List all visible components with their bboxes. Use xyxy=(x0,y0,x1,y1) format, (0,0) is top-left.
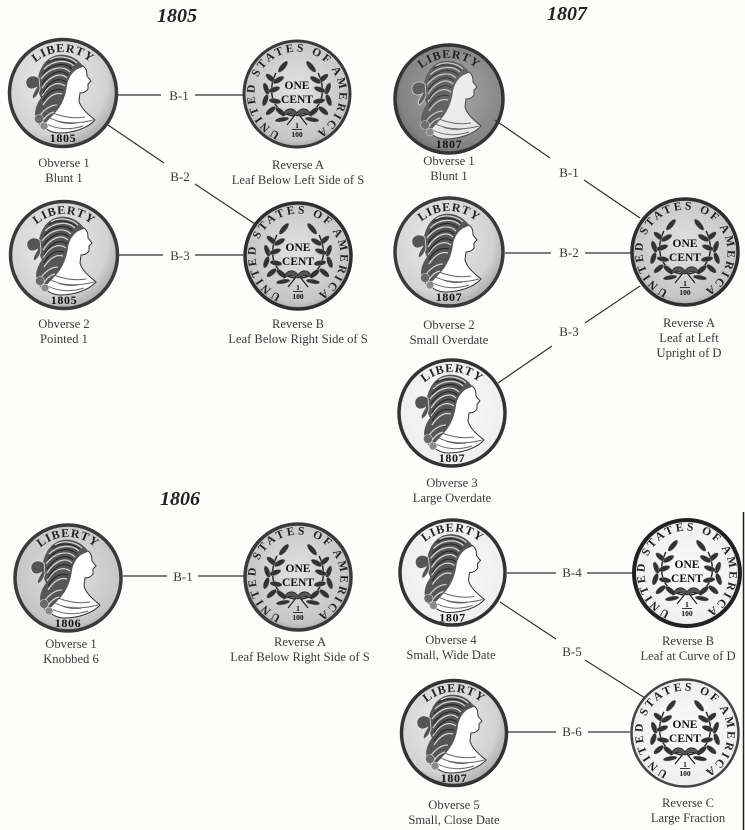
coin: 1807 obverse 5: 1807 xyxy=(441,771,467,785)
coin: 1807 reverse A: ONE xyxy=(673,238,698,250)
connector B-3: B-3 xyxy=(559,324,579,339)
coin: 1807 obverse 3 xyxy=(397,358,507,468)
connector B-2: B-2 xyxy=(559,245,579,260)
coin: 1807 reverse A: CENT xyxy=(669,252,701,264)
caption: reverse A: Leaf at Left xyxy=(659,331,719,345)
caption: reverse B: Leaf Below Right Side of S xyxy=(228,332,368,346)
connector B-1: B-1 xyxy=(173,569,193,584)
caption: reverse A: Upright of D xyxy=(656,346,722,360)
coin: 1806 reverse A: 1 xyxy=(296,604,300,613)
connector B-3 xyxy=(498,286,640,383)
connector B-1 xyxy=(118,88,243,103)
caption: obverse 5 small close date: Small, Close Date xyxy=(408,813,500,827)
caption: reverse A: Reverse A xyxy=(663,316,715,330)
coin: 1807 reverse B: ONE xyxy=(675,559,700,571)
coin: 1805 reverse B: 1 xyxy=(296,283,300,292)
coin: 1805 obverse 2 xyxy=(8,200,120,310)
caption: reverse A: Leaf Below Left Side of S xyxy=(232,173,364,187)
coin: 1807 obverse 5: LIBERTY xyxy=(422,684,486,702)
coin: 1807 obverse 1 xyxy=(393,43,505,155)
year title 1806: 1806 xyxy=(160,488,200,510)
caption: reverse C: Large Fraction xyxy=(651,811,726,825)
coin: 1805 obverse 2: LIBERTY xyxy=(32,206,96,224)
caption: reverse A: Leaf Below Right Side of S xyxy=(230,650,370,664)
coin: 1807 obverse 3: LIBERTY xyxy=(420,364,484,382)
connector B-2 xyxy=(108,125,255,224)
caption: obverse 1 blunt 1: Blunt 1 xyxy=(430,169,468,183)
section: 1807 lower xyxy=(398,518,742,827)
coin: 1805 obverse 1: 1805 xyxy=(50,131,76,145)
caption: reverse A: Reverse A xyxy=(274,635,326,649)
coin: 1807 obverse 3: 1807 xyxy=(439,451,465,465)
caption: obverse 4 small wide date: Small, Wide Date xyxy=(406,648,496,662)
caption: obverse 4 small wide date: Obverse 4 xyxy=(425,633,477,647)
connector B-4 xyxy=(507,565,632,580)
coin: 1805 reverse A: CENT xyxy=(281,94,313,106)
coin: 1807 reverse C: 1 xyxy=(683,760,687,769)
coin: 1807 obverse 4 xyxy=(398,518,507,627)
coin: 1806 reverse A: CENT xyxy=(282,577,314,589)
coin: 1805 reverse A: UNITED STATES OF AMERICA xyxy=(246,44,348,140)
caption: obverse 3 large overdate: Large Overdate xyxy=(413,491,492,505)
coin: 1807 reverse C: UNITED STATES OF AMERICA xyxy=(634,683,736,779)
coin: 1806 obverse 1: LIBERTY xyxy=(36,529,100,548)
coin: 1806 obverse 1 xyxy=(13,523,123,633)
caption: obverse 1 knobbed 6: Knobbed 6 xyxy=(43,652,99,666)
caption: obverse 1 blunt 1: Blunt 1 xyxy=(45,171,83,185)
year title 1807: 1807 xyxy=(547,3,588,25)
coin: 1807 reverse C: CENT xyxy=(669,733,701,745)
caption: obverse 2 pointed 1: Obverse 2 xyxy=(38,317,90,331)
caption: obverse 3 large overdate: Obverse 3 xyxy=(426,476,478,490)
connector B-5 xyxy=(500,602,645,698)
caption: obverse 5 small close date: Obverse 5 xyxy=(428,798,480,812)
caption: reverse B: Reverse B xyxy=(272,317,324,331)
connector B-3: B-3 xyxy=(170,248,190,263)
caption: reverse C: Reverse C xyxy=(662,796,714,810)
coin: 1807 obverse 2 xyxy=(393,196,505,308)
connector B-6 xyxy=(508,724,630,739)
caption: obverse 1 blunt 1: Obverse 1 xyxy=(423,154,475,168)
connector B-3 xyxy=(119,248,243,263)
year title 1805: 1805 xyxy=(157,5,197,27)
connector B-2: B-2 xyxy=(170,169,190,184)
connector B-1: B-1 xyxy=(169,88,189,103)
coin: 1805 reverse B: ONE xyxy=(286,242,311,254)
connector B-1 xyxy=(495,120,640,218)
coin: 1805 obverse 1 xyxy=(8,38,118,148)
coin: 1807 reverse A: 100 xyxy=(679,288,691,297)
coin: 1807 obverse 1: 1807 xyxy=(436,137,462,151)
section: 1805 xyxy=(8,5,368,346)
coin: 1807 obverse 4: 1807 xyxy=(439,610,466,624)
coin: 1807 reverse B: UNITED STATES OF AMERICA xyxy=(636,523,738,619)
connector B-1 xyxy=(123,569,245,584)
caption: obverse 1 blunt 1: Obverse 1 xyxy=(38,156,90,170)
connector B-4: B-4 xyxy=(562,565,582,580)
coin: 1807 reverse C: ONE xyxy=(673,719,698,731)
coin: 1807 obverse 5 xyxy=(400,678,508,788)
caption: reverse A: Reverse A xyxy=(272,158,324,172)
caption: reverse B: Reverse B xyxy=(662,634,714,648)
caption: obverse 2 small overdate: Obverse 2 xyxy=(423,318,475,332)
coin: 1807 reverse C: 100 xyxy=(679,769,691,778)
connector B-1: B-1 xyxy=(559,165,579,180)
coin: 1806 reverse A: 100 xyxy=(292,613,304,622)
coin: 1807 reverse A: UNITED STATES OF AMERICA xyxy=(634,202,736,298)
coin: 1805 obverse 1: LIBERTY xyxy=(30,44,94,62)
coin: 1805 reverse A: 100 xyxy=(291,130,303,139)
connector B-2 xyxy=(505,245,631,260)
coin: 1805 reverse B: UNITED STATES OF AMERICA xyxy=(248,206,348,302)
coin: 1807 reverse B: 100 xyxy=(681,609,693,618)
caption: reverse B: Leaf at Curve of D xyxy=(640,649,736,663)
coin: 1807 reverse A: 1 xyxy=(683,279,687,288)
section: 1807 upper xyxy=(393,3,740,505)
caption: obverse 2 small overdate: Small Overdate xyxy=(410,333,489,347)
caption: obverse 2 pointed 1: Pointed 1 xyxy=(40,332,88,346)
coin: 1805 reverse B: 100 xyxy=(292,292,304,301)
coin: 1805 reverse B: CENT xyxy=(282,256,314,268)
section: 1806 xyxy=(13,488,370,666)
coin: 1806 reverse A: ONE xyxy=(286,563,311,575)
coin: 1807 obverse 2: LIBERTY xyxy=(416,203,480,222)
caption: obverse 1 knobbed 6: Obverse 1 xyxy=(45,637,97,651)
coin: 1806 reverse A: UNITED STATES OF AMERICA xyxy=(248,527,348,623)
connector B-5: B-5 xyxy=(562,644,582,659)
coin: 1805 obverse 2: 1805 xyxy=(51,293,77,307)
coin: 1807 obverse 2: 1807 xyxy=(436,290,462,304)
coin: 1807 obverse 4: LIBERTY xyxy=(420,524,484,542)
coin: 1807 reverse B: 1 xyxy=(685,600,689,609)
connector B-6: B-6 xyxy=(562,724,582,739)
coin: 1805 reverse A: ONE xyxy=(285,80,310,92)
coin: 1807 reverse B: CENT xyxy=(671,573,703,585)
coin: 1807 obverse 1: LIBERTY xyxy=(416,50,480,68)
coin: 1805 reverse A: 1 xyxy=(295,121,299,130)
coin: 1806 obverse 1: 1806 xyxy=(55,616,81,630)
